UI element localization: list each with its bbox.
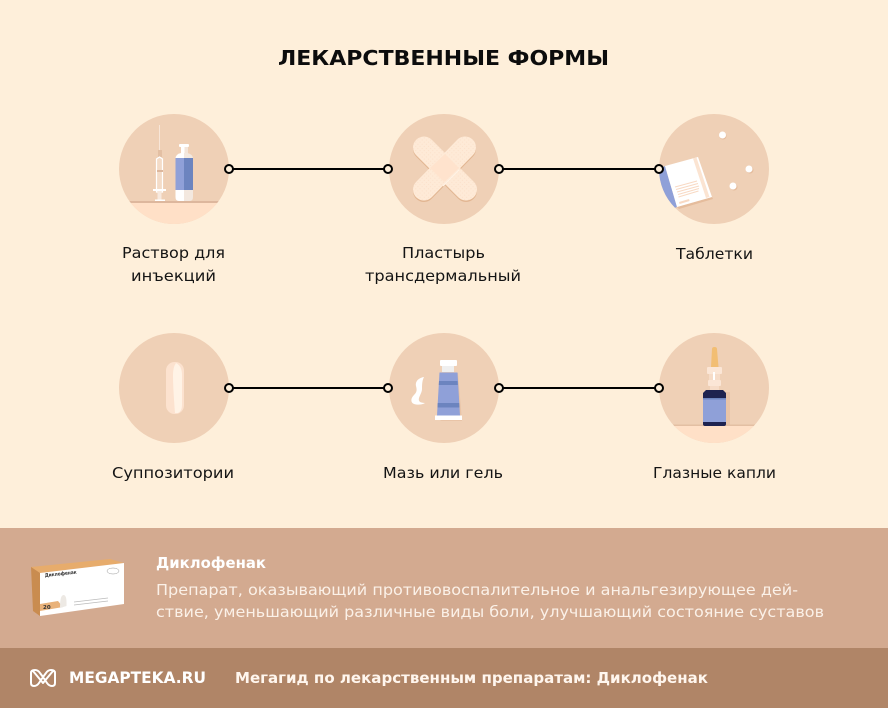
icon: drug box: Диклофенак [44,569,78,579]
icon: patch [389,114,499,224]
icon: syringe and vial [119,114,229,225]
drug description: ствие, уменьшающий различные виды боли, улучшающий состояние суставов [156,603,824,621]
label: tablets: Таблетки [675,245,753,263]
icon: ointment tube [389,333,499,443]
label: eye drops: Глазные капли [653,464,776,482]
icon: tablets [654,114,769,224]
label: injection: Раствор для [122,244,225,262]
panel: drug info [0,528,888,648]
connector: row 2 left [225,384,392,392]
icon: eye drops [659,333,769,446]
icon: logo [31,670,55,686]
label: injection: инъекций [131,267,216,285]
label: suppository: Суппозитории [112,464,234,482]
footer text: Мегагид по лекарственным препаратам: Диклофенак [235,669,708,687]
drug name: Диклофенак [156,554,266,572]
title: ЛЕКАРСТВЕННЫЕ ФОРМЫ [278,46,609,70]
connector: row 1 left [225,165,392,173]
icon: drug box [31,559,124,616]
footer [0,648,888,708]
connector: row 2 right [495,384,663,392]
icon: suppository [119,333,229,443]
label: patch: Пластырь [402,244,485,262]
brand name: MEGAPTEKA.RU [69,668,206,687]
icon: drug box: 20 [43,605,51,611]
drug description: Препарат, оказывающий противовоспалительное и анальгезирующее дей- [156,581,798,599]
connector: row 1 right [495,165,663,173]
label: ointment: Мазь или гель [383,464,503,482]
label: patch [365,244,521,285]
drug description [156,581,824,621]
label: patch: трансдермальный [365,267,521,285]
label: injection [122,244,225,285]
